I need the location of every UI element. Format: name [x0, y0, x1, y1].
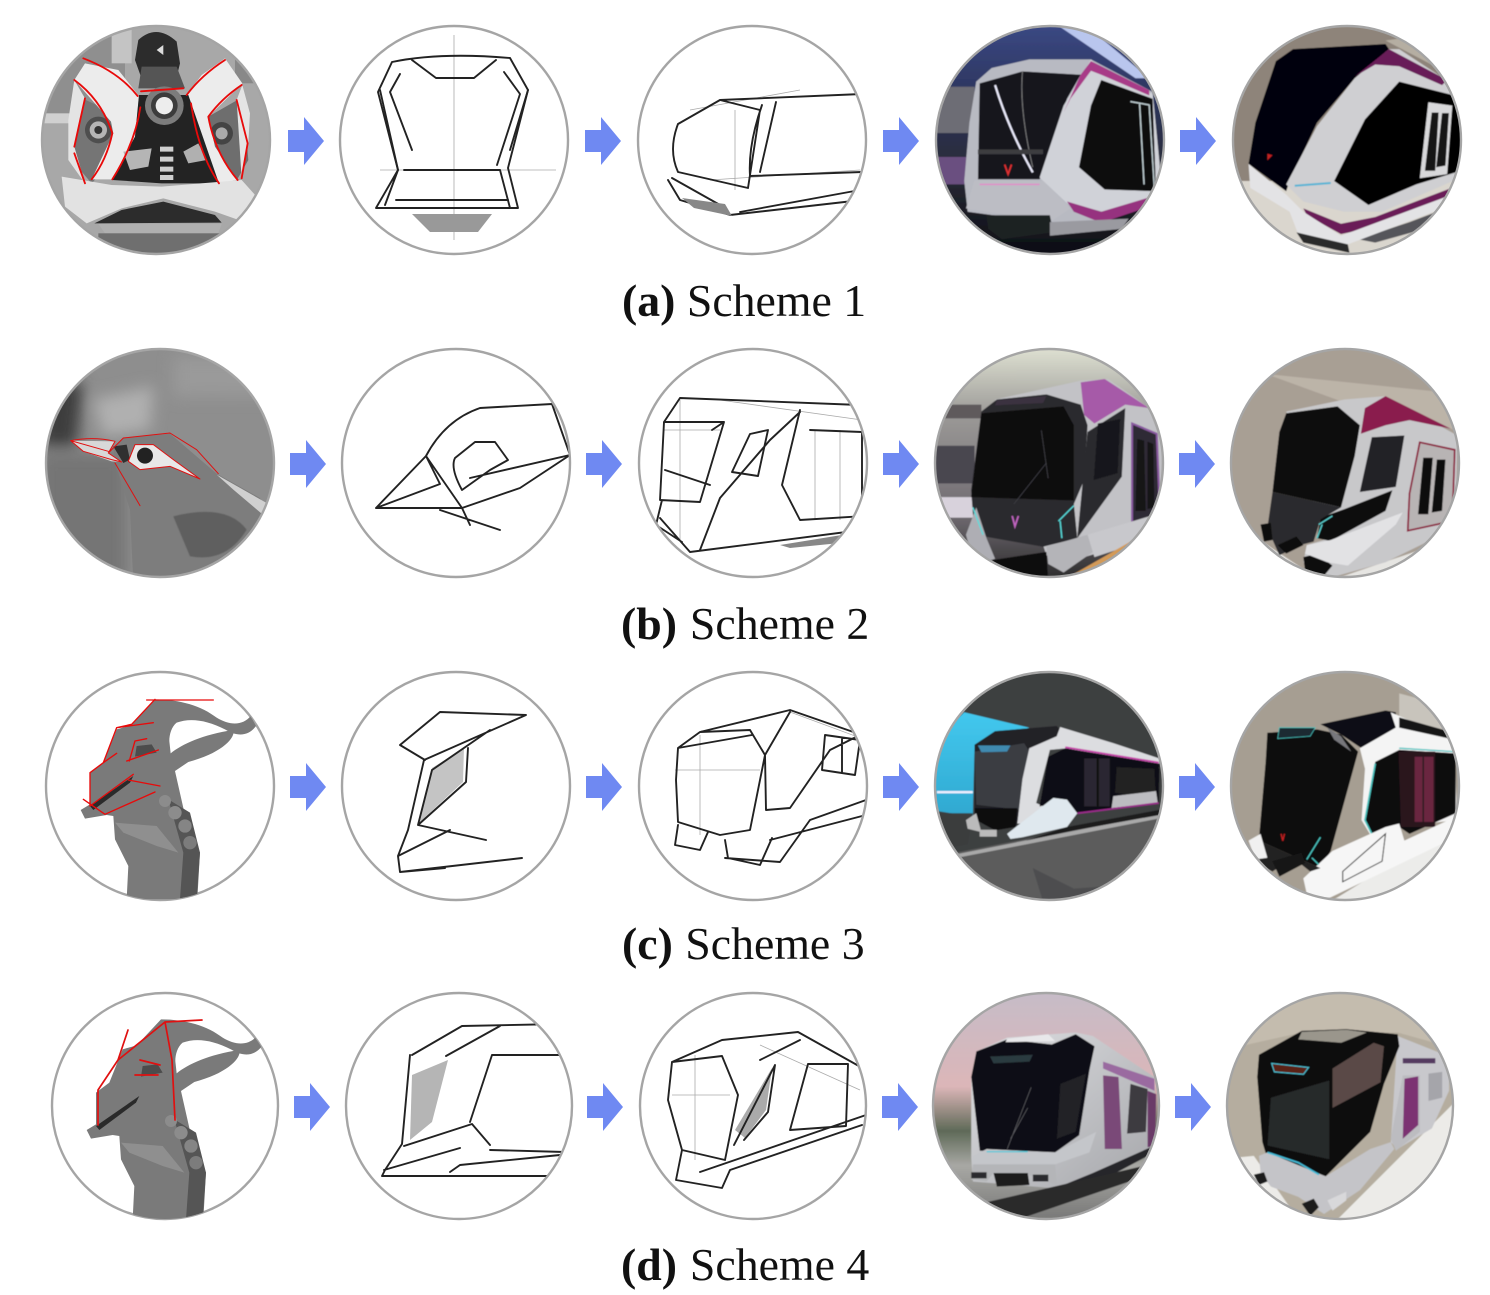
arrow: [587, 1083, 623, 1131]
render: train at station with cyan light: [934, 670, 1164, 902]
caption: Scheme 3: (c) Scheme 3: [622, 918, 865, 969]
sketch: three-quarter view of train: [638, 26, 866, 254]
image: stone gargoyle with red feature lines: [52, 993, 278, 1219]
photo: train model 3: [1225, 666, 1464, 913]
image: stone gargoyle with red feature lines: [46, 672, 274, 900]
render: dark train with purple roof: [934, 348, 1164, 578]
image: bird head with red feature lines: [40, 343, 280, 583]
sketch: front view of train: [340, 26, 568, 254]
sketch: bird-derived line form: [342, 349, 570, 577]
arrow: [883, 117, 919, 165]
photo: train model 2: [1225, 343, 1464, 590]
arrow: [882, 1083, 918, 1131]
arrow: [586, 440, 622, 488]
caption: Scheme 4: (d) Scheme 4: [621, 1239, 869, 1290]
caption: Scheme 2: (b) Scheme 2: [621, 598, 869, 649]
sketch: train three-quarter view: [639, 672, 867, 900]
photo: train model 1: [1225, 20, 1464, 267]
arrow: [883, 440, 919, 488]
arrow: [294, 1083, 330, 1131]
panel: Scheme 2 row: [40, 343, 1464, 590]
render: silver train with sunset background: [932, 992, 1160, 1220]
arrow: [1179, 440, 1215, 488]
sketch: gargoyle-derived line form: [346, 993, 572, 1219]
arrow: [585, 117, 621, 165]
arrow: [1179, 763, 1215, 811]
panel: Scheme 1 row: [35, 20, 1464, 267]
arrow: [290, 440, 326, 488]
panel: Scheme 4 row: [52, 988, 1459, 1235]
caption: Scheme 1: (a) Scheme 1: [622, 275, 866, 326]
render: purple and white train at night: [934, 24, 1166, 256]
arrow: [290, 763, 326, 811]
arrow: [288, 117, 324, 165]
photo: train model 4: [1226, 992, 1454, 1220]
arrow: [586, 763, 622, 811]
arrow: [1175, 1083, 1211, 1131]
sketch: train three-quarter view: [639, 349, 867, 577]
sketch: gargoyle-derived line form: [342, 672, 570, 900]
image: lion head with red feature lines: [35, 20, 282, 260]
arrow: [883, 763, 919, 811]
panel: Scheme 3 row: [46, 666, 1464, 913]
arrow: [1180, 117, 1216, 165]
sketch: train three-quarter view: [640, 993, 866, 1219]
